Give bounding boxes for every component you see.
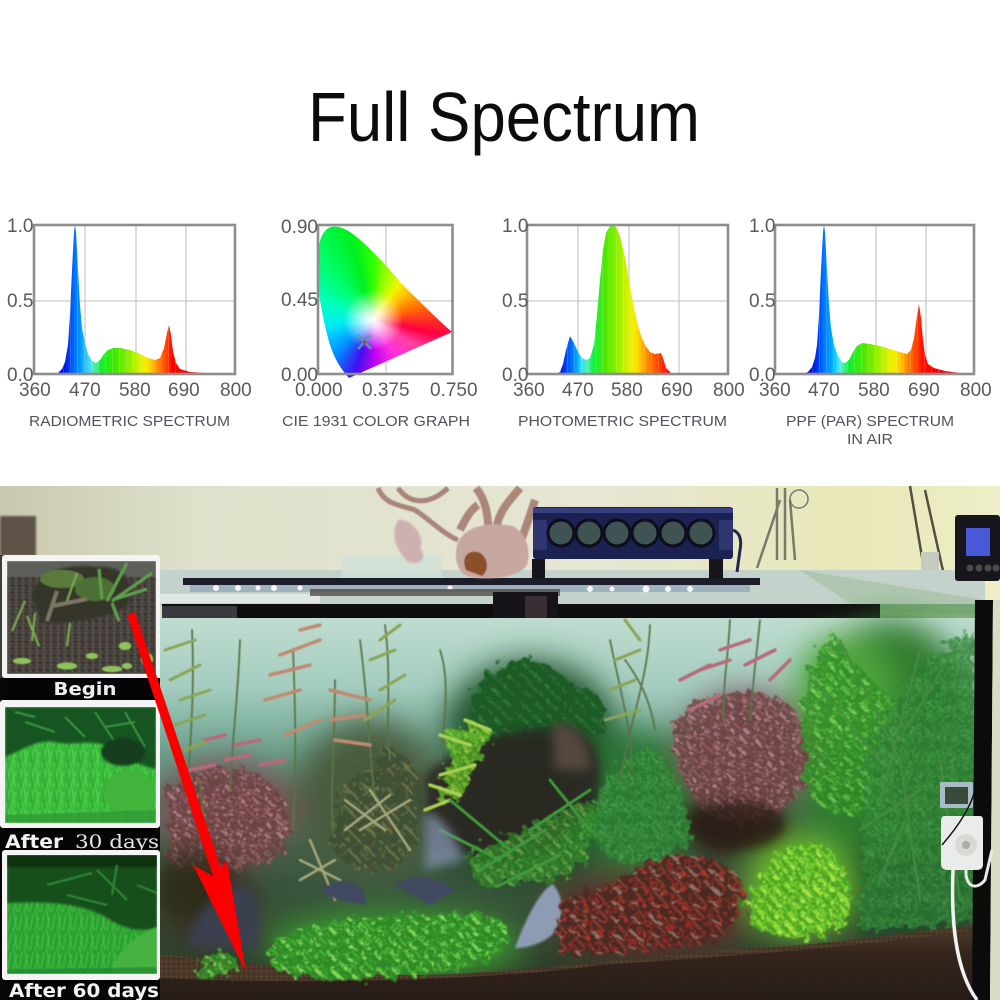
tank front rim bbox=[162, 592, 880, 618]
axis labels: photometric: 470 bbox=[562, 380, 594, 401]
right stem plant mass bbox=[802, 634, 898, 815]
axis labels: radiometric: 0.0 bbox=[7, 365, 33, 386]
spectrum curve: photometric bbox=[556, 225, 672, 374]
axis labels: radiometric bbox=[7, 216, 252, 401]
spectrum curve: PPF bbox=[802, 225, 973, 374]
caption: photometric: PHOTOMETRIC SPECTRUM bbox=[518, 413, 727, 430]
axis labels: PPF: 1.0 bbox=[749, 216, 775, 237]
thermometer display bbox=[940, 782, 973, 808]
title: Full Spectrum bbox=[308, 78, 700, 156]
caption: radiometric: RADIOMETRIC SPECTRUM bbox=[29, 413, 230, 430]
chart: CIE 1931 color graph bbox=[281, 215, 478, 430]
panel: growth progress thumbnails bbox=[0, 555, 160, 1000]
right thin leaves bbox=[815, 640, 960, 900]
axis labels: radiometric: 0.5 bbox=[7, 291, 33, 312]
label: after 30 days: After bbox=[5, 831, 64, 853]
caption: PPF: IN AIR bbox=[847, 431, 893, 448]
axis labels: photometric: 800 bbox=[713, 380, 745, 401]
caption: PPF bbox=[786, 413, 954, 448]
axis labels: photometric: 580 bbox=[611, 380, 643, 401]
axis labels: radiometric: 360 bbox=[19, 380, 51, 401]
coral-pink decor bbox=[394, 520, 423, 563]
caption: PPF: PPF (PAR) SPECTRUM bbox=[786, 413, 954, 430]
wall bbox=[0, 486, 1000, 626]
blue stone upper bbox=[425, 814, 465, 870]
hanging tools bbox=[757, 486, 945, 580]
chart: photometric spectrum bbox=[502, 216, 745, 430]
chart: PPF (PAR) spectrum in air bbox=[749, 216, 992, 448]
salmon leaves bbox=[265, 625, 370, 745]
gamut horseshoe bbox=[319, 226, 452, 378]
stems and leaves bbox=[165, 620, 960, 900]
axis labels: PPF: 690 bbox=[908, 380, 940, 401]
dark rock left bbox=[187, 885, 260, 950]
pink stems upper right bbox=[680, 640, 790, 710]
glass lid and shelf bbox=[160, 555, 985, 626]
axis labels: photometric: 360 bbox=[513, 380, 545, 401]
axis labels: CIE: 0.45 bbox=[281, 290, 318, 311]
axis labels: PPF: 0.0 bbox=[749, 365, 775, 386]
label: after 30 days: 30 days bbox=[75, 831, 159, 853]
label: begin bbox=[2, 678, 160, 700]
right grass mass bbox=[860, 632, 975, 930]
axis labels: photometric: 0.0 bbox=[502, 365, 528, 386]
moss mound bbox=[470, 659, 604, 745]
midground plants bbox=[331, 750, 422, 872]
aquarium photo bbox=[0, 486, 1000, 1000]
axis labels: radiometric: 800 bbox=[220, 380, 252, 401]
substrate back slope bbox=[160, 925, 985, 1000]
foreground carpet bbox=[268, 914, 508, 978]
LED light bar bbox=[183, 578, 760, 596]
small foreground tuft bbox=[195, 953, 238, 978]
pink bush bbox=[673, 692, 806, 823]
axis labels: PPF: 580 bbox=[858, 380, 890, 401]
red plants bbox=[558, 856, 743, 955]
yellow-green leaves bbox=[165, 620, 640, 750]
axis labels: photometric: 690 bbox=[661, 380, 693, 401]
right rock bbox=[552, 724, 590, 770]
hairgrass tuft bbox=[588, 750, 692, 863]
chart: radiometric spectrum bbox=[7, 216, 252, 430]
substrate front bbox=[160, 928, 985, 1000]
axis labels: CIE bbox=[281, 217, 478, 401]
fan unit bbox=[532, 507, 741, 579]
axis labels: CIE: 0.750 bbox=[430, 380, 478, 401]
low-frequency plant colour base bbox=[155, 620, 985, 980]
lime ground cover bbox=[748, 843, 851, 938]
axis labels: PPF: 470 bbox=[808, 380, 840, 401]
tall stems bbox=[188, 620, 760, 830]
axis labels: CIE: 0.90 bbox=[281, 217, 318, 238]
panel: after 60 days bbox=[2, 850, 160, 1000]
panel: begin bbox=[2, 555, 160, 700]
label strip backing bbox=[0, 678, 160, 1000]
small rock blue center bbox=[320, 877, 455, 905]
pink flowers left bbox=[190, 735, 285, 770]
left bush shade bbox=[157, 849, 233, 921]
panel: after 30 days bbox=[0, 700, 160, 853]
driftwood on shelf bbox=[378, 488, 535, 578]
lower green broad leaves bbox=[440, 780, 590, 885]
dark hardscape bbox=[425, 730, 601, 860]
white power device bbox=[941, 790, 992, 1000]
axis labels: CIE: 0.375 bbox=[362, 380, 410, 401]
midground pale leaves bbox=[300, 790, 410, 900]
bright leaves bbox=[425, 720, 490, 810]
yellow-green midground leaves bbox=[435, 725, 492, 800]
water bbox=[160, 618, 985, 1000]
right black post bbox=[972, 600, 993, 1000]
wall controller bbox=[955, 515, 1000, 581]
axis labels: photometric: 0.5 bbox=[502, 291, 528, 312]
axis labels: PPF: 360 bbox=[759, 380, 791, 401]
label: begin: Begin bbox=[54, 679, 116, 700]
axis labels: radiometric: 470 bbox=[69, 380, 101, 401]
axis labels: PPF: 800 bbox=[960, 380, 992, 401]
axis labels: CIE: 0.000 bbox=[295, 380, 343, 401]
axis labels: PPF bbox=[749, 216, 992, 401]
pink bush shade bbox=[685, 801, 785, 849]
axis labels: PPF: 0.5 bbox=[749, 291, 775, 312]
blue-gray stone bbox=[515, 884, 562, 948]
axis labels: photometric bbox=[502, 216, 745, 401]
lower green leaves mass bbox=[465, 800, 594, 885]
axis labels: radiometric: 580 bbox=[119, 380, 151, 401]
axis labels: CIE: 0.00 bbox=[281, 365, 318, 386]
label: after 30 days bbox=[0, 828, 160, 853]
axis labels: radiometric: 1.0 bbox=[7, 216, 33, 237]
left pink bush bbox=[168, 768, 290, 872]
axis labels: photometric: 1.0 bbox=[502, 216, 528, 237]
caption: CIE: CIE 1931 COLOR GRAPH bbox=[282, 413, 470, 430]
axis labels: radiometric: 690 bbox=[168, 380, 200, 401]
right wall strip bbox=[990, 600, 1000, 1000]
spectrum curve: radiometric bbox=[52, 225, 225, 374]
arrow: red progress arrow bbox=[127, 612, 246, 972]
left room edge bbox=[0, 516, 36, 1000]
white point marker bbox=[358, 335, 371, 349]
